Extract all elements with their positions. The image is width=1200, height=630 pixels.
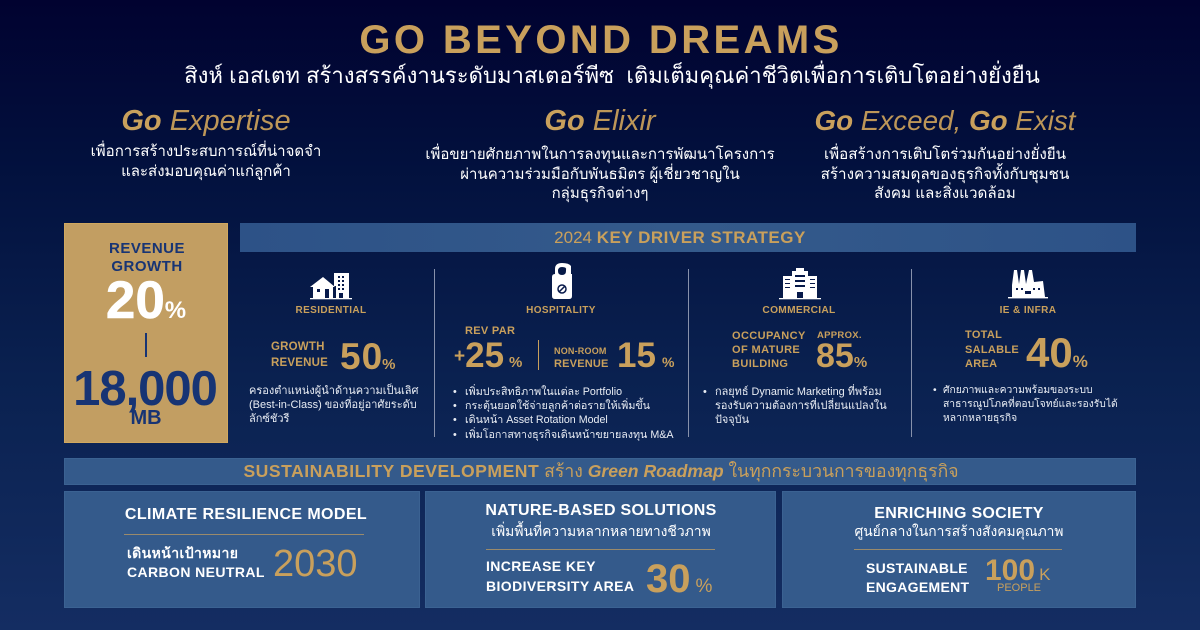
commercial bullets (703, 384, 887, 426)
biodiversity label: BIODIVERSITY AREA (486, 578, 634, 594)
climate heading: CLIMATE RESILIENCE MODEL (125, 506, 367, 523)
carbon neutral label: CARBON NEUTRAL (127, 564, 265, 580)
pillar: Go Exceed, Go Exist (814, 105, 1076, 202)
text: • (453, 386, 457, 398)
total salable area label: TOTAL (965, 329, 1002, 341)
ie and infra label: IE & INFRA (1000, 305, 1056, 316)
non-room revenue label: NON-ROOM (554, 346, 607, 356)
sustainability bar (64, 458, 1136, 485)
infra bullets: หลากหลายธุรกิจ (943, 413, 1017, 424)
pillar: Go Elixir: ผ่านความร่วมมือกับพันธมิตร ผู้เชี่ยวชาญใน (460, 166, 740, 183)
30 percent: 30 % (646, 557, 712, 601)
occupancy label: BUILDING (732, 358, 788, 370)
revenue growth label (109, 240, 185, 275)
nature heading: NATURE-BASED SOLUTIONS (485, 502, 717, 519)
50 percent: 50% (340, 336, 396, 377)
non-room revenue label: REVENUE (554, 358, 609, 370)
infra bullets: สาธารณูปโภคที่ตอบโจทย์และรองรับได้ (943, 399, 1118, 410)
total salable area label (965, 329, 1019, 370)
occupancy label: OF MATURE (732, 344, 800, 356)
revenue growth label: REVENUE (109, 240, 185, 257)
pillar: Go Exceed, Go Exist: สังคม และสิ่งแวดล้อม (874, 185, 1016, 202)
growth revenue label: GROWTH (271, 341, 325, 353)
total salable area label: AREA (965, 358, 997, 370)
key driver heading: 2024 KEY DRIVER STRATEGY (554, 228, 806, 247)
infra bullets: ศักยภาพและความพร้อมของระบบ (943, 385, 1093, 396)
separator (145, 333, 147, 357)
hospitality bullets: เพิ่มประสิทธิภาพในแต่ละ Portfolio (465, 386, 622, 398)
icon: factory (1008, 270, 1048, 298)
carbon neutral label: เดินหน้าเป้าหมาย (127, 545, 238, 561)
plus 25 percent: +25 % (454, 336, 522, 375)
total salable area label: SALABLE (965, 344, 1019, 356)
text: • (453, 414, 457, 426)
people: PEOPLE (997, 582, 1041, 594)
rev par label: REV PAR (465, 325, 515, 337)
panel: revenue growth (64, 223, 228, 443)
hospitality label: HOSPITALITY (526, 305, 596, 316)
commercial bullets: รองรับความต้องการที่เปลี่ยนแปลงใน (715, 400, 887, 412)
residential text (249, 383, 418, 425)
growth revenue label (271, 341, 328, 369)
hospitality bullets: เพิ่มโอกาสทางธุรกิจเดินหน้าขยายลงทุน M&A (465, 429, 674, 441)
occupancy label (732, 330, 806, 370)
approx label: APPROX. (817, 330, 862, 341)
society subheading: ศูนย์กลางในการสร้างสังคมคุณภาพ (854, 524, 1064, 539)
residential text: ลักซ์ชัวรี (249, 413, 289, 425)
residential label: RESIDENTIAL (295, 305, 367, 316)
pillar: Go Elixir: Go Elixir (544, 105, 656, 137)
commercial bullets: กลยุทธ์ Dynamic Marketing ที่พร้อม (715, 386, 882, 398)
residential text: ครองตำแหน่งผู้นำด้านความเป็นเลิศ (249, 385, 418, 397)
MB: MB (130, 407, 162, 429)
biodiversity label (486, 558, 634, 594)
text: • (453, 400, 457, 412)
hospitality bullets: เดินหน้า Asset Rotation Model (465, 414, 608, 426)
85 percent: 85% (816, 337, 867, 375)
infra bullets (933, 384, 1118, 424)
pillar: Go Exceed, Go Exist: Go Exceed, Go Exist (814, 105, 1076, 136)
engagement label: SUSTAINABLE (866, 560, 968, 576)
engagement label: ENGAGEMENT (866, 579, 969, 595)
pillar: Go Expertise: และส่งมอบคุณค่าแก่ลูกค้า (121, 163, 291, 180)
panel: enriching society (782, 491, 1136, 608)
pillar: Go Exceed, Go Exist: เพื่อสร้างการเติบโตร่วมกันอย่างยั่งยืน (824, 146, 1066, 163)
society heading: ENRICHING SOCIETY (874, 505, 1044, 522)
key driver strategy bar (240, 223, 1136, 252)
hospitality bullets (453, 384, 674, 441)
pillar: Go Expertise: Go Expertise (121, 105, 291, 137)
pillar: Go Expertise (91, 105, 321, 180)
nature subheading: เพิ่มพื้นที่ความหลากหลายทางชีวภาพ (491, 523, 711, 539)
18,000: 18,000 (73, 362, 217, 416)
panel: nature-based solutions (425, 491, 776, 608)
icon: residential (310, 273, 352, 300)
pillar: Go Elixir (425, 105, 775, 202)
title: GO BEYOND DREAMS (359, 18, 843, 62)
panel: climate resilience (64, 491, 420, 608)
20 percent: 20% (106, 271, 186, 330)
pillar: Go Elixir: กลุ่มธุรกิจต่างๆ (552, 185, 648, 202)
commercial bullets: ปัจจุบัน (715, 414, 749, 426)
icon: hospitality door hanger (552, 263, 572, 299)
revenue growth label: GROWTH (111, 258, 183, 275)
15 percent: 15 % (617, 336, 674, 375)
text: • (453, 429, 457, 441)
hospitality bullets: กระตุ้นยอดใช้จ่ายลูกค้าต่อรายให้เพิ่มขึ้น (465, 400, 650, 412)
growth revenue label: REVENUE (271, 357, 328, 369)
engagement label (866, 560, 969, 595)
pillar: Go Elixir: เพื่อขยายศักยภาพในการลงทุนและการพัฒนาโครงการ (425, 146, 775, 163)
non-room revenue label (554, 346, 609, 370)
sustainability heading: SUSTAINABILITY DEVELOPMENT สร้าง Green Roadmap ในทุกกระบวนการของทุกธุรกิจ (243, 461, 959, 481)
metric separator (538, 340, 539, 370)
occupancy label: OCCUPANCY (732, 330, 806, 342)
residential text: (Best-in-Class) ของที่อยู่อาศัยระดับ (249, 399, 417, 411)
biodiversity label: INCREASE KEY (486, 558, 596, 574)
commercial label: COMMERCIAL (762, 305, 836, 316)
40 percent: 40% (1026, 329, 1088, 376)
2030: 2030 (273, 543, 358, 585)
text: • (703, 386, 707, 398)
pillar: Go Exceed, Go Exist: สร้างความสมดุลของธุรกิจทั้งกับชุมชน (821, 166, 1069, 183)
icon: commercial building (779, 268, 821, 300)
pillar: Go Expertise: เพื่อการสร้างประสบการณ์ที่น่าจดจำ (91, 143, 321, 160)
100k: 100K (985, 554, 1050, 587)
carbon neutral label (127, 545, 265, 580)
text: • (933, 385, 937, 396)
subtitle: สิงห์ เอสเตท สร้างสรรค์งานระดับมาสเตอร์พีซ เติมเต็มคุณค่าชีวิตเพื่อการเติบโตอย่างยั่งยืน (184, 63, 1040, 88)
